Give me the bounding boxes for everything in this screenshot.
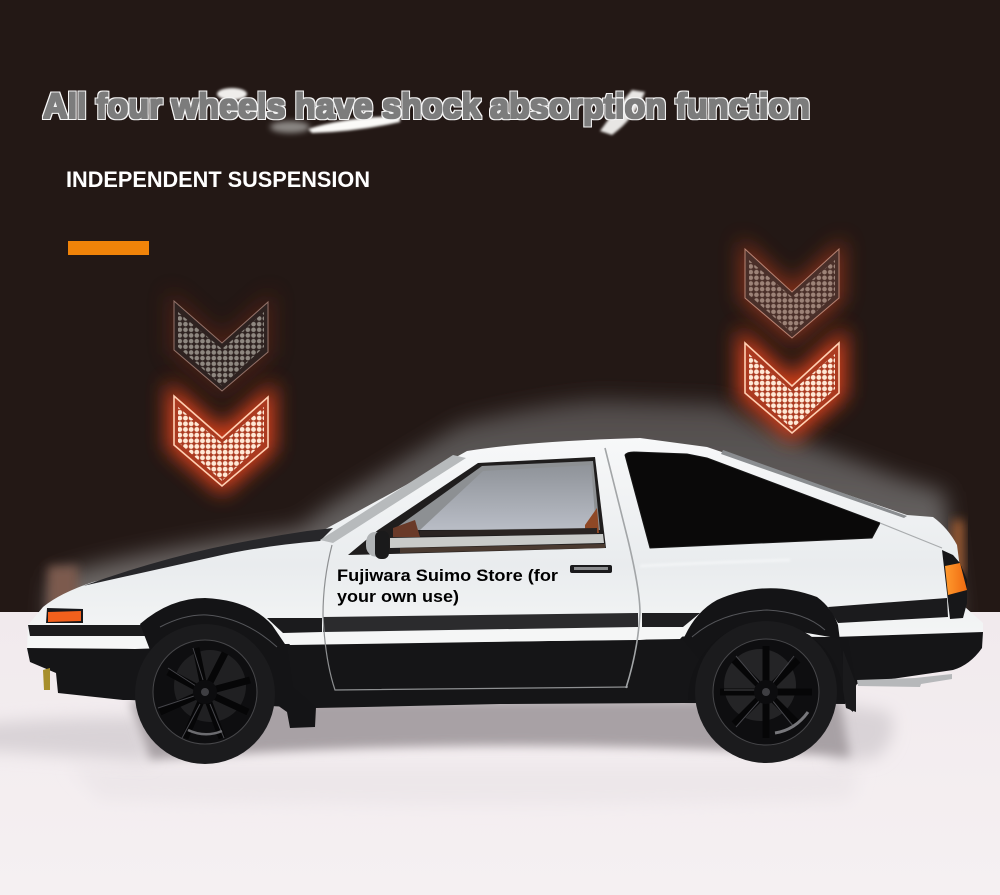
icon: dim chevron, right [745, 249, 839, 338]
rear arch highlight [692, 610, 825, 637]
side stripe, door [323, 613, 638, 632]
inner sill [400, 544, 605, 553]
car body, white shell [27, 438, 983, 650]
front arch highlight [160, 615, 277, 647]
side stripe, front fender [267, 618, 322, 633]
front indicator housing [46, 608, 83, 623]
door window frame [348, 457, 606, 555]
door window glass [420, 465, 596, 530]
floor [0, 612, 1000, 895]
icon: dim chevron, left [174, 301, 268, 391]
interior glimpse, left [393, 520, 420, 537]
floor shadows under car [0, 700, 893, 805]
rear indicator light [945, 563, 967, 595]
hatch crease [880, 523, 942, 548]
body shine, rear quarter [640, 560, 790, 566]
rear mudflap [843, 650, 856, 712]
windshield pillar [320, 455, 466, 543]
store text on door [337, 566, 558, 606]
icon: lit chevron, left [174, 396, 268, 486]
exhaust [857, 674, 952, 687]
hatch glass edge [721, 450, 907, 518]
subtitle: INDEPENDENT SUSPENSION [66, 167, 370, 192]
blurred motion ghost of car [48, 400, 964, 620]
side stripe, rear door section [642, 613, 700, 627]
dashboard line [420, 528, 597, 536]
door seam, rear edge [605, 448, 640, 688]
front indicator light [48, 611, 81, 622]
rear quarter stripe [828, 598, 948, 623]
car [27, 438, 983, 764]
door mirror [366, 531, 389, 559]
rear wheel arch flare [683, 588, 856, 712]
interior glimpse, right [585, 508, 599, 533]
icon: lit chevron, right [745, 343, 839, 433]
hood black stripe [83, 528, 333, 586]
chrome window sill [390, 534, 604, 548]
front wheel [135, 624, 275, 764]
lower black body panel [27, 632, 983, 708]
orange accent bar [68, 241, 149, 255]
front gold plate [43, 668, 50, 690]
store text on door: your own use) [337, 587, 459, 606]
store text on door: Fujiwara Suimo Store (for [337, 566, 558, 585]
chrome inner frame [393, 461, 600, 530]
rear wheel well [688, 622, 844, 700]
dark studio background [0, 0, 1000, 612]
front wheel arch flare [140, 598, 316, 728]
door handle [570, 565, 612, 573]
rear wheel [695, 621, 837, 763]
front bumper stripe [28, 625, 157, 636]
white door trim strip [283, 628, 690, 645]
rear quarter window [625, 452, 880, 548]
door seam, front edge [323, 545, 628, 690]
rear light housing [942, 550, 967, 619]
brush smears behind title [217, 88, 645, 135]
title: All four wheels have shock absorption function [43, 86, 810, 126]
